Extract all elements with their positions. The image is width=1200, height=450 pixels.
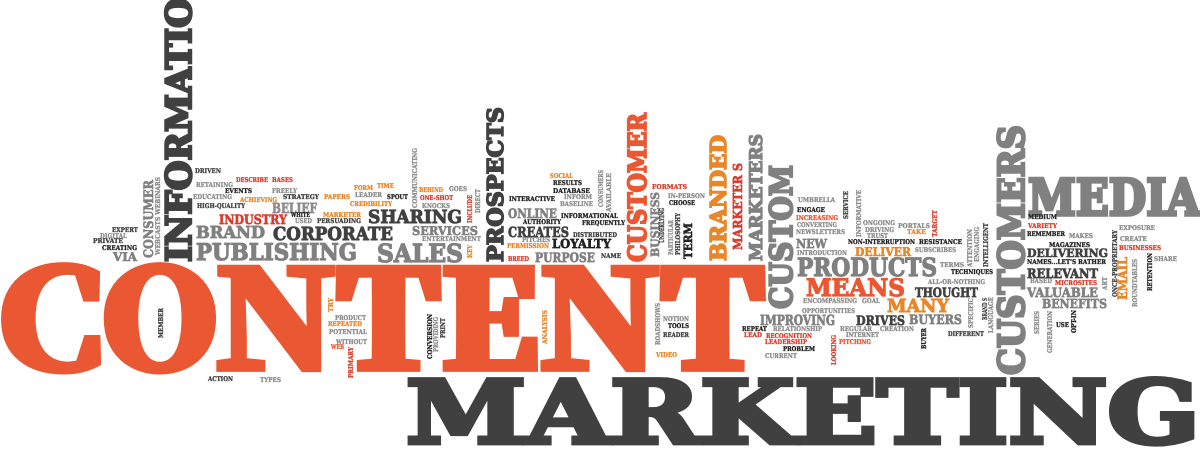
- large word: BRANDED: BRANDED: [706, 135, 732, 261]
- word cluster: means, thought, many: CURRENT: [765, 352, 797, 360]
- word cluster: sharing and sales: SHARING: [368, 207, 462, 228]
- word cluster: left of INFORMATIO: VIA: [112, 250, 138, 264]
- word cluster: online and loyalty: NAME: [601, 252, 621, 260]
- large word: CUSTOMER: CUSTOMER: [623, 113, 652, 262]
- word cluster: means, thought, many: LEADERSHIP: [765, 338, 807, 346]
- word cluster: products and delivery: ENGAGE: [797, 206, 825, 214]
- word cluster: brand and publishing: ACHIEVING: [239, 196, 277, 204]
- word cluster: means, thought, many: ALL-OR-NOTHING: [927, 278, 985, 286]
- word cluster: means, thought, many: ENCOMPASSING: [803, 297, 857, 305]
- word cluster: brand and publishing: INDUSTRY: [219, 213, 288, 228]
- word cluster: products and delivery: TAKE: [907, 228, 926, 236]
- word cluster: under MEDIA: BENEFITS: [1042, 296, 1107, 311]
- word cluster: online and loyalty: INFORM: [564, 193, 592, 201]
- word cluster: means, thought, many: REPEAT: [742, 325, 767, 333]
- word cluster: sharing and sales: ONE-SHOT: [420, 194, 453, 202]
- word cluster: inside CONTENT letters: ACTION: [207, 375, 233, 383]
- word cluster: products and delivery: INTRODUCTION: [797, 249, 847, 257]
- word cluster: products and delivery: RESISTANCE: [919, 238, 962, 246]
- word cluster: products and delivery: SUBSCRIBES: [915, 246, 956, 254]
- word cluster: products and delivery: TERMS: [940, 261, 964, 269]
- word cluster: sharing and sales: DIRECT: [474, 189, 482, 213]
- word cluster: under MEDIA: GENERATION: [1046, 311, 1054, 353]
- word cluster: under MEDIA: DELIVERING: [1027, 246, 1108, 260]
- word cluster: under MEDIA: ONCE-PROPRIETARY: [1111, 230, 1119, 297]
- word cluster: means, thought, many: OPPORTUNITIES: [802, 307, 855, 315]
- word cluster: inside CONTENT letters: CONVERSION: [426, 314, 434, 359]
- word cluster: online and loyalty: [507, 170, 625, 266]
- word cluster: products and delivery: [796, 190, 993, 282]
- word cluster: business and term: [648, 163, 745, 259]
- word cluster: inside CONTENT letters: REPEATED: [328, 320, 362, 328]
- word cluster: means, thought, many: INTERNET: [846, 331, 879, 339]
- word cluster: products and delivery: TECHNIQUES: [951, 268, 993, 276]
- word cluster: means, thought, many: DRIVES: [856, 314, 905, 329]
- word cluster: inside CONTENT letters: [157, 298, 689, 384]
- large word: CUSTOM: CUSTOM: [764, 165, 800, 309]
- word cluster: brand and publishing: BRAND: [196, 223, 265, 242]
- word cluster: inside CONTENT letters: PRINT: [439, 318, 447, 338]
- word cluster: inside CONTENT letters: MEMBER: [157, 307, 165, 338]
- word cluster: brand and publishing: HIGH-QUALITY: [197, 202, 245, 210]
- word cluster: sharing and sales: KEY: [466, 245, 474, 258]
- word cluster: business and term: CHOOSE: [669, 199, 695, 207]
- word cluster: products and delivery: ONGOING: [863, 219, 895, 227]
- word cluster: means, thought, many: LEAD: [744, 331, 762, 339]
- word cluster: under MEDIA: ROUNDTABLES: [1131, 259, 1139, 307]
- word cluster: products and delivery: DELIVER: [855, 245, 912, 259]
- word cluster: brand and publishing: MARKETER: [323, 211, 362, 219]
- word cluster: sharing and sales: SALES: [377, 239, 463, 268]
- word cluster: brand and publishing: FREELY: [272, 187, 297, 195]
- word cluster: under MEDIA: REMEMBER: [1027, 230, 1065, 238]
- word cluster: products and delivery: INFORMATIVE: [855, 190, 863, 237]
- word cluster: means, thought, many: THOUGHT: [915, 286, 978, 301]
- word cluster: sharing and sales: BEHIND: [419, 186, 443, 194]
- word cluster: brand and publishing: DESCRIBE: [236, 176, 268, 184]
- word cluster: sharing and sales: SERVICES: [412, 224, 478, 238]
- word cluster: means, thought, many: BRAND S: [981, 298, 989, 320]
- word cluster: online and loyalty: LOYALTY: [552, 236, 612, 251]
- word cluster: products and delivery: ATTENTION: [966, 229, 974, 268]
- large word: PROSPECTS: PROSPECTS: [483, 107, 509, 262]
- word cluster: online and loyalty: PITCHES: [522, 236, 550, 244]
- word cluster: means, thought, many: LOOKING: [830, 335, 838, 365]
- word cluster: products and delivery: TRUST: [867, 232, 888, 240]
- word cluster: inside CONTENT letters: PRIMARY: [347, 347, 355, 378]
- word cluster: left of INFORMATIO: [93, 177, 162, 264]
- word cluster: products and delivery: UMBRELLA: [798, 196, 836, 204]
- word cluster: inside CONTENT letters: POTENTIAL: [329, 328, 367, 336]
- word cluster: inside CONTENT letters: TRY: [327, 298, 335, 312]
- word cluster: online and loyalty: AVAILABLE: [605, 173, 613, 213]
- word cluster: under MEDIA: USE: [1056, 321, 1069, 329]
- word cluster: online and loyalty: DATABASE: [553, 187, 590, 195]
- word cluster: left of INFORMATIO: DIGITAL: [100, 232, 127, 240]
- word cluster: online and loyalty: DISTRIBUTED: [573, 231, 617, 239]
- word cluster: business and term: PARTICULAR: [667, 220, 675, 255]
- word cluster: brand and publishing: DRIVEN: [195, 167, 221, 175]
- word cluster: means, thought, many: REGULAR: [840, 325, 873, 333]
- word cluster: sharing and sales: KNOCKS: [422, 202, 450, 210]
- word cluster: inside CONTENT letters: NOTION: [663, 315, 689, 323]
- word cluster: under MEDIA: ART: [1101, 277, 1109, 291]
- word cluster: brand and publishing: STRATEGY: [283, 193, 319, 201]
- word cluster: means, thought, many: PROBLEM: [783, 345, 815, 353]
- word cluster: inside CONTENT letters: TYPES: [260, 376, 281, 384]
- word cluster: left of INFORMATIO: CONSUMER: [142, 180, 157, 258]
- word cluster: means, thought, many: MANY: [887, 296, 950, 317]
- word cluster: sharing and sales: COMMUNICATING: [411, 148, 419, 208]
- word cluster: means, thought, many: LANGUAGE: [987, 297, 995, 333]
- word cluster: products and delivery: ENGAGING: [973, 227, 981, 262]
- word cluster: products and delivery: TARGET: [931, 210, 939, 237]
- word cluster: products and delivery: PRODUCTS: [797, 253, 937, 282]
- word cluster: means, thought, many: CREATION: [880, 325, 914, 333]
- word cluster: brand and publishing: FORM: [354, 184, 373, 192]
- word cluster: business and term: UNDERLYING: [658, 208, 666, 243]
- word cluster: online and loyalty: AUTHORITY: [522, 218, 561, 226]
- word cluster: inside CONTENT letters: TOOLS: [668, 322, 689, 330]
- word cluster: means, thought, many: BUYER: [920, 328, 928, 349]
- word cluster: brand and publishing: [193, 167, 393, 266]
- word cluster: sharing and sales: INCLUDE: [466, 195, 474, 223]
- word cluster: under MEDIA: EXPOSURE: [1119, 224, 1155, 232]
- word cluster: brand and publishing: CREDIBILITY: [350, 200, 392, 208]
- word cluster: brand and publishing: EVENTS: [225, 187, 252, 195]
- word cluster: under MEDIA: MICROSITES: [1055, 279, 1097, 287]
- word cluster: products and delivery: PORTALS: [898, 222, 930, 230]
- word cluster: brand and publishing: EDUCATING: [193, 193, 232, 201]
- word cluster: brand and publishing: RETAINING: [196, 181, 233, 189]
- word cluster: online and loyalty: ONLINE: [508, 207, 557, 222]
- title word: CONTENT: CONTENT: [0, 216, 765, 407]
- word cluster: brand and publishing: PERSUADING: [317, 217, 361, 225]
- word cluster: under MEDIA: NAMES...LET'S RATHER: [1027, 258, 1107, 266]
- word cluster: products and delivery: NEW: [796, 236, 828, 251]
- word cluster: under MEDIA: MAGAZINES: [1049, 241, 1090, 249]
- word cluster: under MEDIA: RETENTION: [1146, 253, 1154, 291]
- word cluster: sharing and sales: SPOUT: [387, 193, 408, 201]
- word cluster: online and loyalty: SOCIAL: [550, 172, 573, 180]
- word cluster: brand and publishing: BASES: [272, 176, 293, 184]
- word cluster: means, thought, many: SPECIFIC: [967, 298, 975, 328]
- word cluster: under MEDIA: VARIETY: [1027, 222, 1057, 230]
- word cluster: online and loyalty: RESULTS: [553, 179, 582, 187]
- word cluster: left of INFORMATIO: WEBCASTS WEBINARS: [154, 177, 162, 256]
- large word: MARKETERS: MARKETERS: [747, 134, 767, 261]
- word cluster: means, thought, many: IMPROVING: [760, 313, 835, 329]
- word cluster: products and delivery: NEWSLETTERS: [796, 228, 845, 236]
- word cluster: online and loyalty: CONSUMERS: [597, 170, 605, 207]
- large word: INFORMATIO: INFORMATIO: [159, 0, 200, 262]
- word cluster: business and term: FORMATS: [652, 183, 687, 191]
- word cluster: business and term: MARKETER S: [730, 163, 745, 250]
- word cluster: under MEDIA: OPT-IN: [1070, 310, 1078, 333]
- word cluster: online and loyalty: PERMISSION: [507, 242, 549, 250]
- word cluster: means, thought, many: [742, 273, 995, 365]
- word cluster: under MEDIA: BUSINESSES: [1119, 244, 1161, 252]
- word cluster: online and loyalty: BASELINE: [560, 200, 593, 208]
- large word: CUSTOMERS: CUSTOMERS: [991, 125, 1033, 375]
- word cluster: inside CONTENT letters: ANALYSIS: [541, 310, 549, 345]
- word cluster: brand and publishing: PUBLISHING: [196, 239, 357, 266]
- word cluster: inside CONTENT letters: WITHOUT: [335, 338, 367, 346]
- word cluster: means, thought, many: GOAL: [862, 297, 880, 305]
- word cluster: means, thought, many: RECOGNITION: [766, 332, 812, 340]
- word cluster: brand and publishing: BELIEF: [272, 201, 317, 217]
- word cluster: online and loyalty: BREED: [508, 255, 529, 263]
- word cluster: sharing and sales: TIME: [377, 182, 394, 190]
- word cluster: online and loyalty: PURPOSE: [535, 251, 595, 266]
- word cluster: under MEDIA: BASED: [1030, 277, 1052, 285]
- word cluster: under MEDIA: VALUABLE: [1026, 286, 1098, 301]
- word cluster: under MEDIA: EMAIL: [1116, 257, 1131, 300]
- word cluster: sharing and sales: ENTERTAINMENT: [422, 235, 481, 243]
- word cluster: inside CONTENT letters: WEB: [330, 343, 344, 351]
- word cluster: brand and publishing: LEADER: [355, 191, 383, 199]
- word cluster: brand and publishing: CORPORATE: [273, 224, 393, 245]
- word cluster: inside CONTENT letters: PROVIDING: [432, 317, 440, 352]
- word cluster: means, thought, many: BUYERS: [909, 313, 962, 328]
- word cluster: means, thought, many: MEANS: [806, 273, 905, 302]
- word cluster: online and loyalty: CREATES: [508, 225, 569, 241]
- word cluster: products and delivery: SERVICE: [842, 191, 850, 219]
- word cluster: left of INFORMATIO: PRIVATE: [93, 237, 123, 245]
- word cluster: products and delivery: INCREASING: [796, 214, 838, 222]
- word cluster: brand and publishing: PAPERS: [324, 193, 350, 201]
- word cluster: products and delivery: CONVERTING: [797, 221, 837, 229]
- word cluster: online and loyalty: INFORMATIONAL: [561, 212, 618, 220]
- word cluster: business and term: IN-PERSON: [668, 192, 705, 200]
- word cluster: under MEDIA: MAKES: [1069, 232, 1093, 240]
- word cluster: inside CONTENT letters: VIDEO: [655, 351, 677, 359]
- word cluster: business and term: TERM: [681, 223, 695, 259]
- word cluster: business and term: PHILOSOPHY: [674, 213, 682, 255]
- word cluster: under MEDIA: MEDIUM: [1028, 213, 1057, 221]
- word cluster: left of INFORMATIO: EXPERT: [112, 226, 138, 234]
- word cluster: under MEDIA: RELEVANT: [1027, 267, 1098, 282]
- word cluster: inside CONTENT letters: PRODUCT: [335, 314, 366, 322]
- word cluster: online and loyalty: INTERACTIVE: [509, 195, 555, 203]
- word cluster: under MEDIA: SERIES: [1033, 311, 1041, 334]
- word cluster: means, thought, many: DIFFERENT: [948, 330, 984, 338]
- word cluster: left of INFORMATIO: CREATING: [102, 244, 137, 252]
- word cluster: inside CONTENT letters: ROADSHOWS: [654, 303, 662, 345]
- word cluster: brand and publishing: WHITE: [290, 211, 310, 219]
- word cluster: products and delivery: DRIVING: [865, 226, 894, 234]
- word cluster: under MEDIA: [1026, 213, 1177, 353]
- word cluster: under MEDIA: SHARE: [1154, 255, 1177, 263]
- word cluster: products and delivery: NON-INTERRUPTION: [848, 238, 915, 246]
- word cluster: means, thought, many: RELATIONSHIP: [773, 325, 822, 333]
- word cluster: sharing and sales: [368, 148, 482, 268]
- word cluster: under MEDIA: CREATE: [1120, 235, 1147, 243]
- word cluster: products and delivery: INTELLIGENT: [982, 223, 990, 267]
- word cluster: online and loyalty: FREQUENTLY: [582, 219, 625, 227]
- word cluster: inside CONTENT letters: READER: [663, 331, 689, 339]
- word cluster: means, thought, many: PITCHING: [839, 338, 871, 346]
- word cluster: sharing and sales: GOES: [449, 185, 467, 193]
- word cluster: business and term: BUSINESS: [648, 192, 662, 257]
- word cluster: brand and publishing: USED: [295, 217, 312, 225]
